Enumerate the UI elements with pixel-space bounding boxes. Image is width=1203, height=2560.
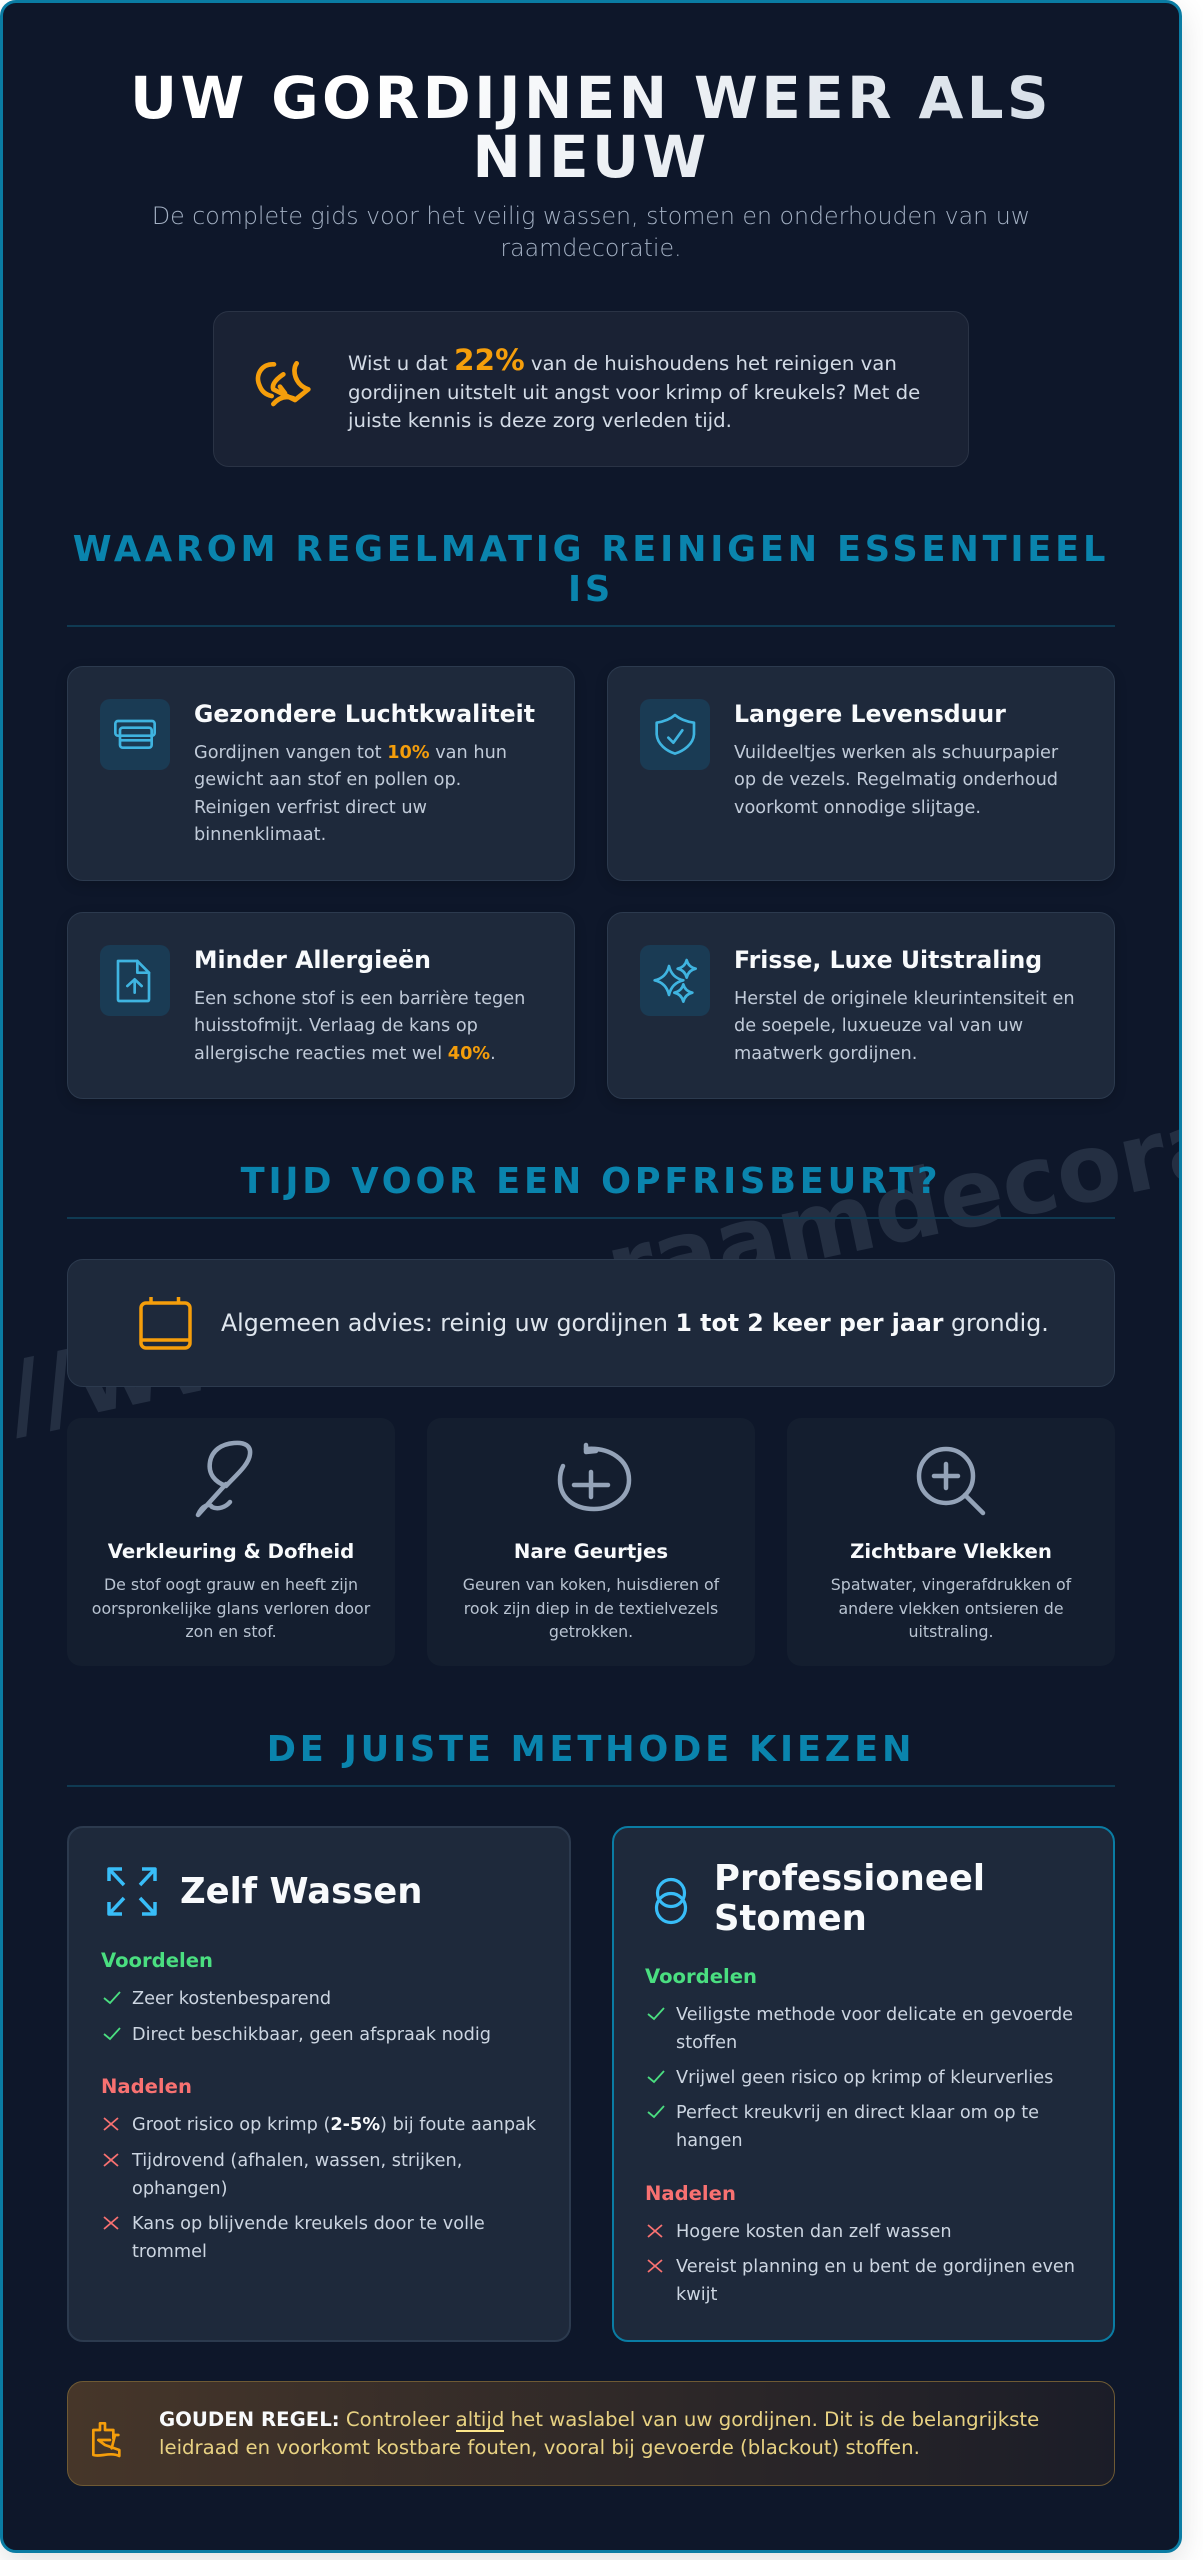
description: rook zijn diep in de textielvezels bbox=[464, 1599, 718, 1618]
list: nadelen: trommel bbox=[132, 2242, 207, 2262]
icon: magnifier bbox=[916, 1446, 986, 1516]
rule text: altijd bbox=[456, 2408, 504, 2431]
description bbox=[463, 1575, 720, 1641]
description bbox=[194, 989, 525, 1064]
card: allergieen bbox=[67, 912, 575, 1099]
title: Stomen bbox=[714, 1898, 867, 1938]
rule text: leidraad en voorkomt kostbare fouten, vooral bij gevoerde (blackout) stoffen. bbox=[159, 2436, 920, 2459]
watermark bbox=[0, 1058, 1182, 1453]
card: levensduur bbox=[607, 666, 1115, 881]
description: allergische reacties met wel 40%. bbox=[194, 1044, 496, 1064]
list: nadelen: Vereist planning en u bent de gordijnen even bbox=[676, 2257, 1075, 2277]
description bbox=[734, 989, 1075, 1064]
description: andere vlekken ontsieren de bbox=[838, 1599, 1064, 1618]
heading nadelen: Nadelen bbox=[101, 2075, 192, 2098]
title bbox=[0, 69, 1182, 187]
title: Zichtbare Vlekken bbox=[850, 1540, 1052, 1563]
list: nadelen: Kans op blijvende kreukels door te volle bbox=[132, 2214, 485, 2234]
card: geurtjes bbox=[427, 1418, 755, 1666]
list: nadelen: ophangen) bbox=[132, 2178, 228, 2198]
icon: arrows bbox=[107, 1867, 157, 1916]
subtitle: raamdecoratie. bbox=[500, 234, 682, 262]
description: binnenklimaat. bbox=[194, 825, 326, 845]
description: Vuildeeltjes werken als schuurpapier bbox=[734, 743, 1058, 763]
description: uitstraling. bbox=[908, 1622, 994, 1641]
list: nadelen bbox=[648, 2222, 1075, 2304]
description: Geuren van koken, huisdieren of bbox=[463, 1575, 719, 1594]
subtitle: De complete gids voor het veilig wassen, stomen en onderhouden van uw bbox=[152, 202, 1030, 230]
description: op de vezels. Regelmatig onderhoud bbox=[734, 770, 1058, 790]
rule text: GOUDEN REGEL: Controleer het waslabel van uw gordijnen. Dit is de belangrijkste bbox=[159, 2408, 1039, 2431]
title: Zelf Wassen bbox=[180, 1871, 422, 1912]
description: oorspronkelijke glans verloren door bbox=[92, 1599, 370, 1618]
description: De stof oogt grauw en heeft zijn bbox=[104, 1575, 358, 1594]
description: Herstel de originele kleurintensiteit en bbox=[734, 989, 1075, 1009]
list: voordelen bbox=[104, 1989, 491, 2045]
list: voordelen bbox=[648, 2005, 1073, 2150]
list: nadelen: Tijdrovend (afhalen, wassen, strijken, bbox=[132, 2151, 462, 2171]
icon: rotate plus bbox=[558, 1442, 632, 1512]
description: zon en stof. bbox=[185, 1622, 277, 1641]
callout text: gordijnen uitstelt uit angst voor krimp of kreukels? Met de bbox=[348, 380, 920, 404]
description bbox=[734, 743, 1058, 818]
heading: tijd: TIJD VOOR EEN OPFRISBEURT? bbox=[241, 1161, 941, 1202]
list: voordelen: hangen bbox=[676, 2130, 743, 2150]
title: Gezondere Luchtkwaliteit bbox=[194, 700, 535, 728]
panel: zelf wassen bbox=[67, 1826, 571, 2342]
icon: rings bbox=[654, 1878, 688, 1924]
description bbox=[194, 743, 507, 845]
icon: warning shape bbox=[256, 361, 311, 406]
heading voordelen: Voordelen bbox=[645, 1965, 757, 1988]
description bbox=[831, 1575, 1072, 1641]
icon: air filter bbox=[100, 699, 170, 770]
title: Verkleuring & Dofheid bbox=[108, 1540, 354, 1563]
panel: golden rule bbox=[67, 2381, 1115, 2486]
list: voordelen: Veiligste methode voor delicate en gevoerde bbox=[676, 2005, 1073, 2025]
description: huisstofmijt. Verlaag de kans op bbox=[194, 1016, 478, 1036]
title bbox=[714, 1858, 985, 1938]
list: nadelen: Groot risico op krimp (2-5%) bij foute aanpak bbox=[132, 2115, 536, 2135]
card: vlekken bbox=[787, 1418, 1115, 1666]
heading: methode: DE JUISTE METHODE KIEZEN bbox=[267, 1729, 915, 1770]
infographic container: //www. bbox=[0, 1271, 370, 1453]
icon: sparkles bbox=[640, 945, 710, 1016]
card: uitstraling bbox=[607, 912, 1115, 1099]
description: maatwerk gordijnen. bbox=[734, 1044, 917, 1064]
icon: calendar bbox=[139, 1297, 192, 1350]
description: voorkomt onnodige slijtage. bbox=[734, 798, 981, 818]
heading: waarom bbox=[73, 529, 1109, 610]
title: Frisse, Luxe Uitstraling bbox=[734, 946, 1042, 974]
list: voordelen: Vrijwel geen risico op krimp of kleurverlies bbox=[676, 2068, 1053, 2088]
title: Professioneel bbox=[714, 1858, 985, 1899]
title: UW GORDIJNEN WEER ALS bbox=[130, 64, 1052, 132]
icon: pen bbox=[196, 1440, 252, 1518]
description: Spatwater, vingerafdrukken of bbox=[831, 1575, 1071, 1594]
card: luchtkwaliteit bbox=[67, 666, 575, 881]
heading nadelen: Nadelen bbox=[645, 2182, 736, 2205]
title: Langere Levensduur bbox=[734, 700, 1006, 728]
description: Reinigen verfrist direct uw bbox=[194, 798, 427, 818]
subtitle bbox=[152, 202, 1030, 262]
card: verkleuring bbox=[67, 1418, 395, 1666]
description: de soepele, luxueuze val van uw bbox=[734, 1016, 1023, 1036]
rule text bbox=[159, 2408, 1039, 2459]
heading: waarom: WAAROM REGELMATIG REINIGEN ESSENTIEEL bbox=[73, 529, 1109, 570]
callout text: Wist u dat 22% van de huishoudens het reinigen van bbox=[348, 343, 897, 377]
description: Gordijnen vangen tot 10% van hun bbox=[194, 743, 507, 763]
list: voordelen: Zeer kostenbesparend bbox=[132, 1989, 331, 2009]
heading voordelen: Voordelen bbox=[101, 1949, 213, 1972]
callout text: juiste kennis is deze zorg verleden tijd. bbox=[348, 409, 732, 432]
description bbox=[92, 1575, 370, 1641]
description: getrokken. bbox=[549, 1622, 633, 1641]
list: voordelen: stoffen bbox=[676, 2032, 737, 2052]
description: Een schone stof is een barrière tegen bbox=[194, 989, 525, 1009]
panel: statistic callout bbox=[213, 311, 969, 467]
title: Minder Allergieën bbox=[194, 946, 431, 974]
panel: advice bbox=[67, 1259, 1115, 1387]
list: nadelen: kwijt bbox=[676, 2284, 717, 2304]
list: nadelen bbox=[104, 2115, 536, 2262]
heading: waarom: IS bbox=[568, 569, 614, 610]
list: voordelen: Perfect kreukvrij en direct klaar om op te bbox=[676, 2103, 1039, 2123]
callout text bbox=[348, 343, 920, 432]
list: nadelen: Hogere kosten dan zelf wassen bbox=[676, 2222, 952, 2242]
title: Nare Geurtjes bbox=[514, 1540, 668, 1563]
list: voordelen: Direct beschikbaar, geen afspraak nodig bbox=[132, 2025, 491, 2045]
icon: shield bbox=[640, 699, 710, 770]
title: NIEUW bbox=[472, 123, 710, 191]
description: gewicht aan stof en pollen op. bbox=[194, 770, 461, 790]
icon: file bbox=[100, 945, 170, 1016]
icon: label check bbox=[92, 2422, 121, 2458]
advice text: Algemeen advies: reinig uw gordijnen 1 tot 2 keer per jaar grondig. bbox=[221, 1309, 1049, 1337]
panel: professioneel stomen bbox=[612, 1826, 1115, 2342]
